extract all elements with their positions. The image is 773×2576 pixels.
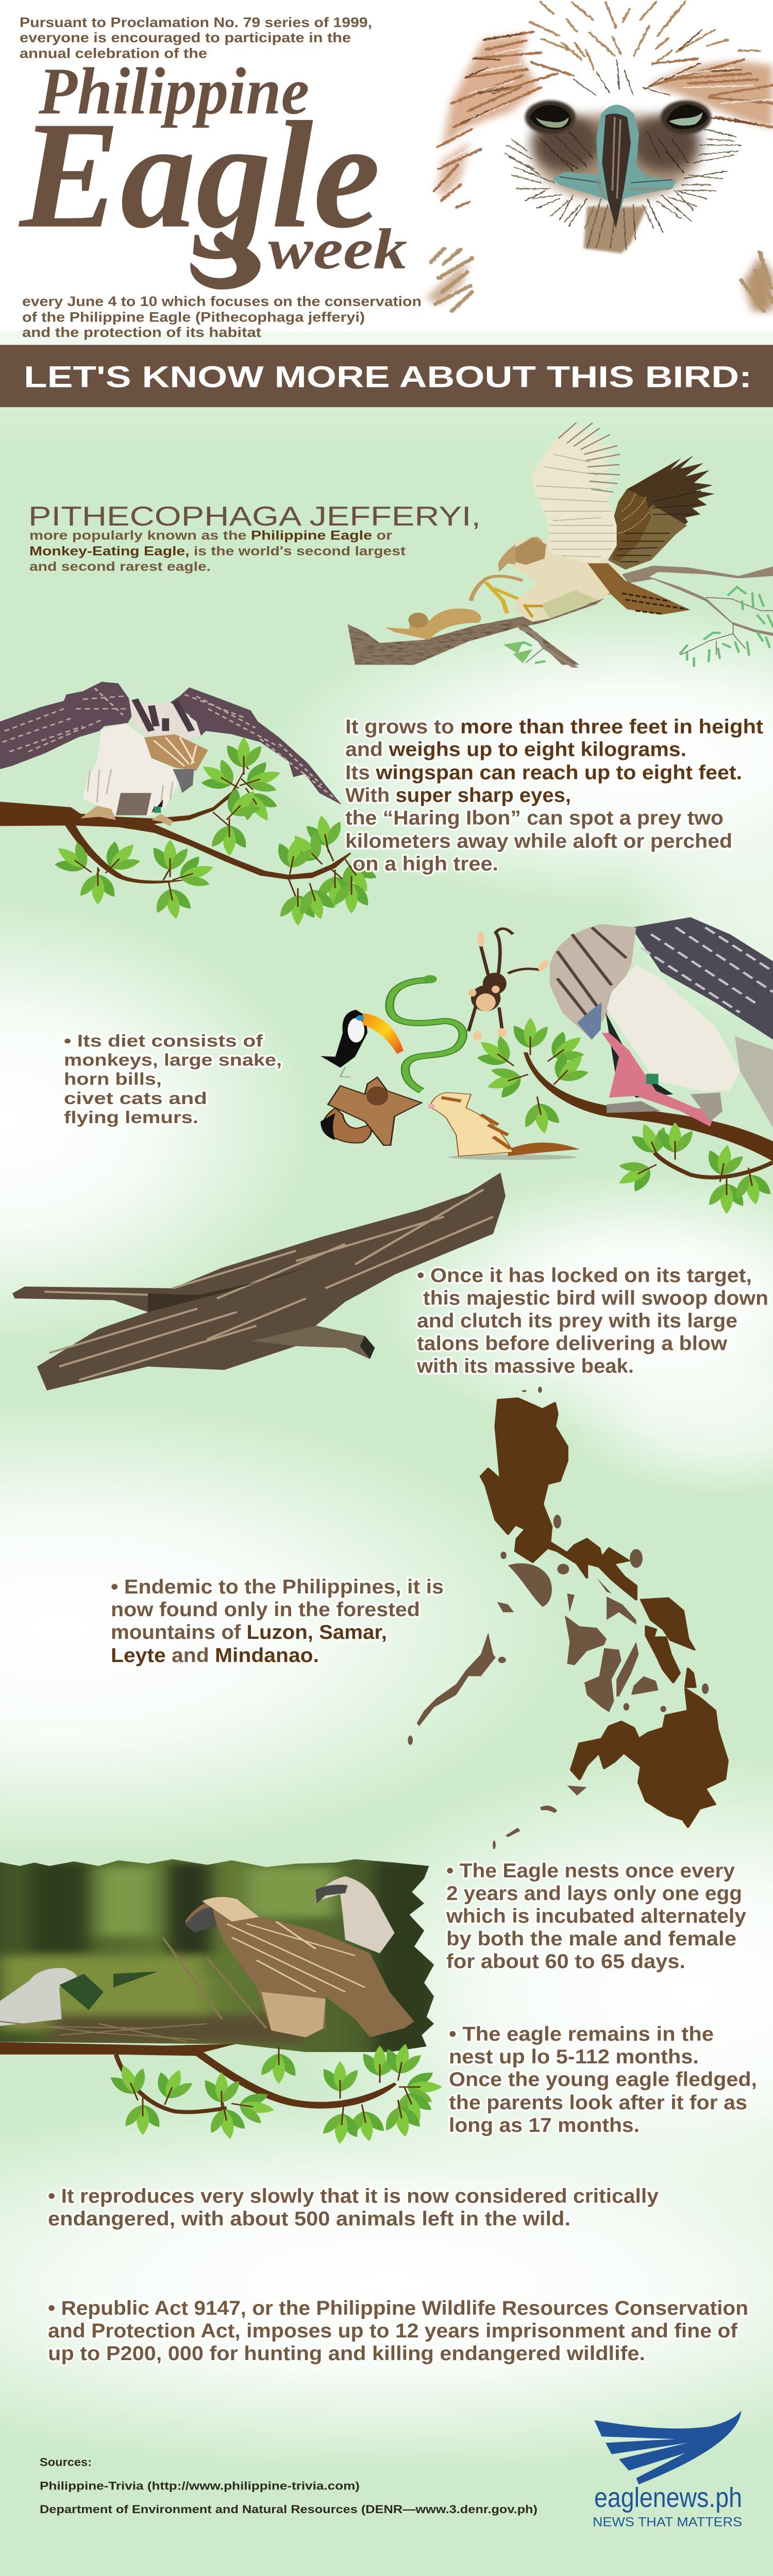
pale wing — [532, 423, 620, 563]
text: nesting: for about 60 to 65 days. — [446, 1950, 685, 1972]
intro text top: everyone is encouraged to participate in the — [20, 30, 351, 46]
intro text top: Pursuant to Proclamation No. 79 series of 1999, — [20, 15, 372, 30]
snake — [390, 975, 463, 1091]
adult eagle behind — [315, 1876, 395, 1953]
text: nesting: 2 years and lays only one egg — [446, 1882, 742, 1904]
branch with leaves 3 — [0, 2041, 442, 2145]
text: nesting — [446, 1859, 747, 1972]
twig leaves — [515, 587, 773, 666]
title: Philippine Eagle week: Eagle — [17, 90, 380, 260]
soaring eagle — [12, 1173, 506, 1391]
feather strokes — [431, 2, 773, 312]
pithecophaga heading and intro — [28, 501, 481, 574]
text: fledging — [449, 2023, 757, 2136]
text: diet: • Its diet consists of — [64, 1031, 263, 1050]
text: size and eyesight — [345, 715, 763, 875]
main dark islands — [481, 1398, 728, 1827]
text: size and eyesight: kilometers away while aloft or perched — [345, 829, 732, 852]
banner: LET'S KNOW MORE ABOUT THIS BIRD: — [24, 360, 752, 394]
text: reproduction: • It reproduces very slowly that it is now considered critically — [48, 2184, 659, 2207]
flying lemur — [321, 1077, 422, 1145]
perched eagle spreading wings — [0, 682, 342, 826]
text: reproduction: endangered, with about 500 animals left in the wild. — [48, 2207, 570, 2230]
beak — [552, 105, 677, 228]
eyes — [525, 100, 711, 134]
lighter islands — [408, 1386, 709, 1849]
text: diet: monkeys, large snake, — [64, 1050, 282, 1070]
title: Philippine Eagle week: Philippine — [38, 55, 309, 128]
branch left part — [348, 537, 621, 665]
text: nesting: which is incubated alternately — [446, 1905, 747, 1927]
chick — [0, 1968, 77, 2026]
pithecophaga heading and intro: and second rarest eagle. — [29, 559, 211, 574]
text: size and eyesight: the “Haring Ibon” can spot a prey two — [345, 806, 724, 829]
dark wing — [608, 455, 715, 570]
monkey — [471, 576, 523, 601]
text: hunting: with its massive beak. — [416, 1354, 634, 1377]
eagle eating prey on branch — [470, 917, 773, 1214]
crest colour wash — [426, 34, 773, 312]
eagle attacking monkey on branch — [348, 423, 773, 668]
text: size and eyesight: on a high tree. — [352, 852, 498, 875]
civet — [428, 1093, 579, 1160]
branch with leaves 2 — [470, 1018, 773, 1214]
icon: wing — [594, 2411, 741, 2484]
adult eagle front — [185, 1896, 414, 2037]
text: fledging: the parents look after it for as — [449, 2091, 747, 2113]
text: fledging: long as 17 months. — [449, 2114, 640, 2136]
sources: Sources: — [40, 2456, 92, 2469]
toucan — [321, 1010, 404, 1077]
sources — [40, 2456, 537, 2516]
intro text top — [20, 15, 372, 61]
text: size and eyesight: With super sharp eyes, — [345, 784, 571, 806]
text: size and eyesight: and weighs up to eight kilograms. — [345, 738, 686, 760]
text: endemic: Leyte and Mindanao. — [111, 1644, 319, 1666]
text: reproduction — [48, 2184, 659, 2230]
right branches — [622, 566, 773, 636]
logo — [593, 2411, 742, 2529]
text: size and eyesight: Its wingspan can reach up to eight feet. — [345, 761, 742, 784]
text: hunting — [416, 1264, 768, 1377]
text: hunting: and clutch its prey with its large — [417, 1309, 737, 1332]
intro text top: annual celebration of the — [20, 46, 207, 61]
text: diet — [64, 1031, 282, 1127]
intro text bottom: of the Philippine Eagle (Pithecophaga jefferyi) — [22, 310, 365, 325]
text: republic act — [48, 2297, 748, 2364]
text: endemic — [111, 1575, 444, 1666]
text: diet: horn bills, — [64, 1069, 162, 1089]
head and breast — [498, 537, 621, 610]
text: endemic: mountains of Luzon, Samar, — [111, 1621, 387, 1643]
text: republic act: up to P200, 000 for hunting and killing endangered wildlife. — [48, 2342, 645, 2364]
nest sticks — [0, 1938, 266, 2042]
branch with leaves 1 — [0, 737, 381, 926]
nest photo — [0, 1846, 444, 2056]
facial bristles — [505, 60, 741, 253]
body — [515, 537, 607, 622]
pithecophaga heading and intro: Monkey-Eating Eagle, is the world's second largest — [29, 544, 406, 558]
eagle face illustration — [426, 2, 773, 312]
text: nesting: by both the male and female — [446, 1927, 736, 1950]
logo: NEWS THAT MATTERS — [593, 2514, 742, 2529]
tail — [587, 563, 691, 615]
text: nesting: • The Eagle nests once every — [446, 1859, 735, 1882]
text: diet: civet cats and — [64, 1088, 207, 1108]
prey animals — [321, 928, 579, 1160]
banner — [0, 345, 773, 407]
text: hunting: • Once it has locked on its target, — [417, 1264, 752, 1286]
text: size and eyesight: It grows to more than three feet in height — [345, 715, 763, 738]
text: fledging: • The eagle remains in the — [449, 2023, 714, 2045]
title: Philippine Eagle week: week — [268, 217, 407, 281]
intro text bottom: and the protection of its habitat — [22, 325, 261, 340]
text: diet: flying lemurs. — [64, 1107, 198, 1127]
text: endemic: now found only in the forested — [111, 1598, 420, 1620]
sources: Philippine-Trivia (http://www.philippine-trivia.com) — [40, 2480, 360, 2493]
map of the Philippines — [408, 1386, 728, 1849]
intro text bottom: every June 4 to 10 which focuses on the conservation — [22, 294, 422, 310]
title: Philippine Eagle week — [17, 55, 407, 290]
sources: Department of Environment and Natural Resources (DENR—www.3.denr.gov.ph) — [40, 2503, 537, 2516]
text: hunting: talons before delivering a blow — [417, 1332, 727, 1354]
text: endemic: • Endemic to the Philippines, it is — [111, 1575, 444, 1598]
pithecophaga heading and intro: PITHECOPHAGA JEFFERYI, — [28, 501, 481, 532]
intro text bottom — [22, 294, 422, 340]
text: fledging: nest up lo 5-112 months. — [449, 2045, 699, 2067]
monkey — [468, 928, 551, 1040]
pithecophaga heading and intro: more popularly known as the Philippine Eagle or — [29, 528, 393, 543]
